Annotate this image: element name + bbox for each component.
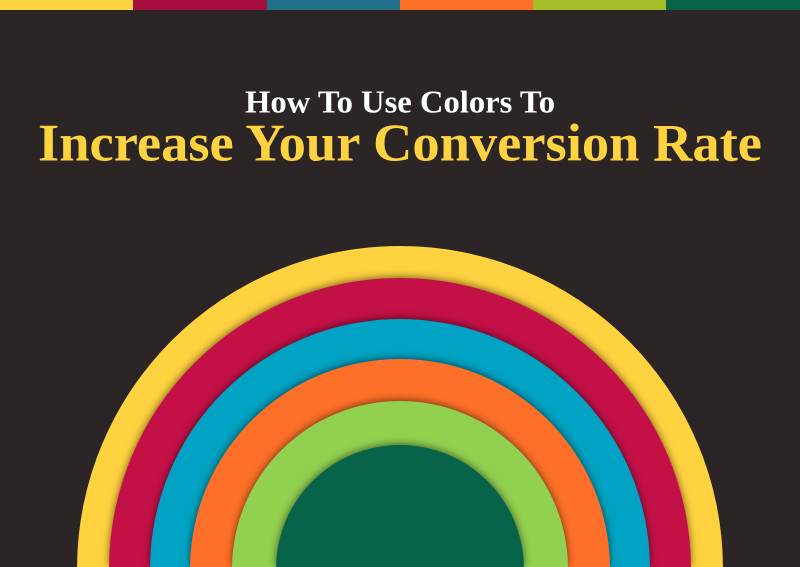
green arc bbox=[232, 401, 568, 567]
dark green centre bbox=[276, 445, 524, 567]
crimson arc bbox=[109, 278, 691, 567]
title line 2: Increase Your Conversion Rate bbox=[38, 114, 762, 172]
title line 1: How To Use Colors To bbox=[245, 84, 555, 120]
title bbox=[38, 84, 762, 172]
yellow arc bbox=[77, 246, 723, 567]
top colour stripe bbox=[0, 0, 800, 10]
blue arc bbox=[150, 319, 650, 567]
orange arc bbox=[190, 359, 610, 567]
